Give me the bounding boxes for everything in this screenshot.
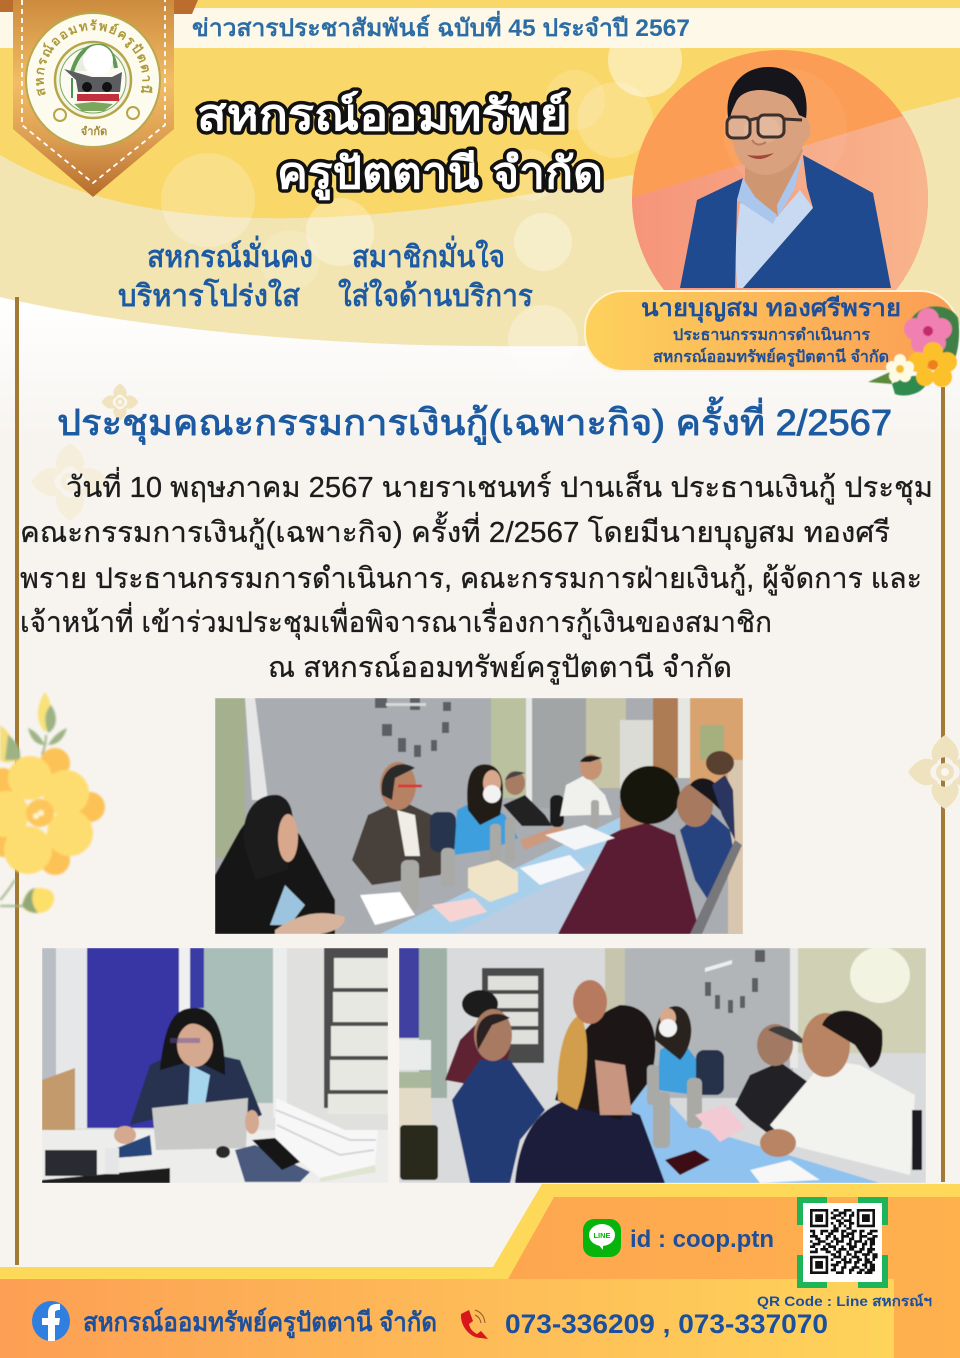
paper shelf [399,1040,431,1070]
person: man in maroon shirt [558,820,700,934]
thermoses and dishes [647,1065,702,1148]
person: woman in navy [712,775,735,840]
photo: meeting from side [399,948,926,1183]
nose and smile [752,140,766,145]
organisation title [197,90,603,200]
person: man in black [735,1062,812,1150]
bag [400,1125,438,1180]
jacket [680,155,891,288]
right chair [690,840,742,934]
person: man in blue shirt [680,808,735,900]
person: man in white shirt [560,775,612,816]
body paragraph [20,467,933,685]
side lines [15,297,945,1265]
tropical flowers [868,306,959,395]
body paragraph: ณ สหกรณ์ออมทรัพย์ครูปัตตานี จำกัด [268,651,732,685]
stack of paper [275,1098,378,1178]
shirt [735,190,813,288]
face [729,85,810,175]
pink hibiscus [904,308,952,353]
hair [727,67,807,122]
LINE icon [583,1219,621,1257]
yellow flower [908,342,957,387]
LINE icon: LINE [593,1231,611,1240]
shirt collar [737,155,803,224]
body paragraph: วันที่ 10 พฤษภาคม 2567 นายราเชนทร์ ปานเส็น ประธานเงินกู้ ประชุม [66,467,933,505]
seal logo [25,12,161,148]
organisation title: ครูปัตตานี จำกัด [277,149,603,200]
keyboard and calculator [42,1168,170,1183]
laptop [152,1098,248,1150]
person: man behind [445,1010,510,1090]
chair [430,812,456,852]
desk [42,1130,388,1183]
position line: ประธานกรรมการดำเนินการ [673,326,870,344]
wall clock [705,950,765,1013]
chairman name: นายบุญสม ทองศรีพราย [641,295,901,324]
neck [745,145,803,217]
footer contact bar [0,1184,960,1358]
header background waves [0,0,960,440]
person: man in brown jacket [352,800,450,885]
table [600,1050,880,1183]
bokeh circles [161,23,682,375]
phones and notebook [235,1145,310,1182]
person: woman in blue shirt [454,798,518,855]
Facebook page name: สหกรณ์ออมทรัพย์ครูปัตตานี จำกัด [83,1307,437,1339]
QR label: QR Code : Line สหกรณ์ฯ [757,1293,932,1309]
chair [696,1050,724,1095]
portrait of chairman [632,50,928,290]
Facebook icon [32,1301,70,1341]
seal logo: สหกรณ์ออมทรัพย์ครูปัตตานี [36,19,152,96]
person: man in white shirt [770,1060,915,1175]
slogan: ใส่ใจด้านบริการ [338,279,533,313]
slogan: บริหารโปร่งใส [118,278,300,313]
person: woman in blue [657,1038,697,1095]
organisation line: สหกรณ์ออมทรัพย์ครูปัตตานี จำกัด [653,347,889,368]
body paragraph: คณะกรรมการเงินกู้(เฉพาะกิจ) ครั้งที่ 2/2567 โดยมีนายบุญสม ทองศรี [20,511,890,550]
pale decorative motifs [31,384,960,809]
person: woman in hijab [215,800,335,934]
slogan: สหกรณ์มั่นคง [147,236,313,274]
seal ring text [44,30,142,95]
ribbon with seal logo [0,0,198,197]
phone icon [461,1310,488,1339]
organisation title: สหกรณ์ออมทรัพย์ [197,90,568,140]
name pill [585,291,958,371]
orange circle [632,50,928,290]
newsletter issue text: ข่าวสารประชาสัมพันธ์ ฉบับที่ 45 ประจำปี 2567 [192,10,690,42]
table [380,815,640,934]
QR code [800,1200,885,1285]
slogan: สมาชิกมั่นใจ [352,236,505,274]
person: woman with pinstripe jacket [515,1095,665,1183]
slogan [118,236,533,313]
wall clock [375,698,451,757]
body paragraph: พราย ประธานกรรมการดำเนินการ, คณะกรรมการฝ่ายเงินกู้, ผู้จัดการ และ [20,563,922,596]
photo: committee meeting wide view [215,698,743,934]
yellow flower decoration [0,692,105,913]
glasses [727,115,802,138]
photo: staff member at laptop [42,948,388,1183]
person: man in blue shirt [452,1060,545,1183]
woman at laptop [130,1048,262,1125]
header strip with newsletter issue [0,8,960,48]
person: man in black [503,795,552,826]
phone numbers: 073-336209 , 073-337070 [505,1309,828,1339]
seal logo: จำกัด [81,125,107,138]
meeting heading: ประชุมคณะกรรมการเงินกู้(เฉพาะกิจ) ครั้งที่ 2/2567 [57,396,892,445]
thermoses and tissue [401,800,599,910]
white flower [886,354,914,382]
LINE id: id : coop.ptn [630,1226,774,1253]
body paragraph: เจ้าหน้าที่ เข้าร่วมประชุมเพื่อพิจารณาเรื่องการกู้เงินของสมาชิก [20,602,772,640]
